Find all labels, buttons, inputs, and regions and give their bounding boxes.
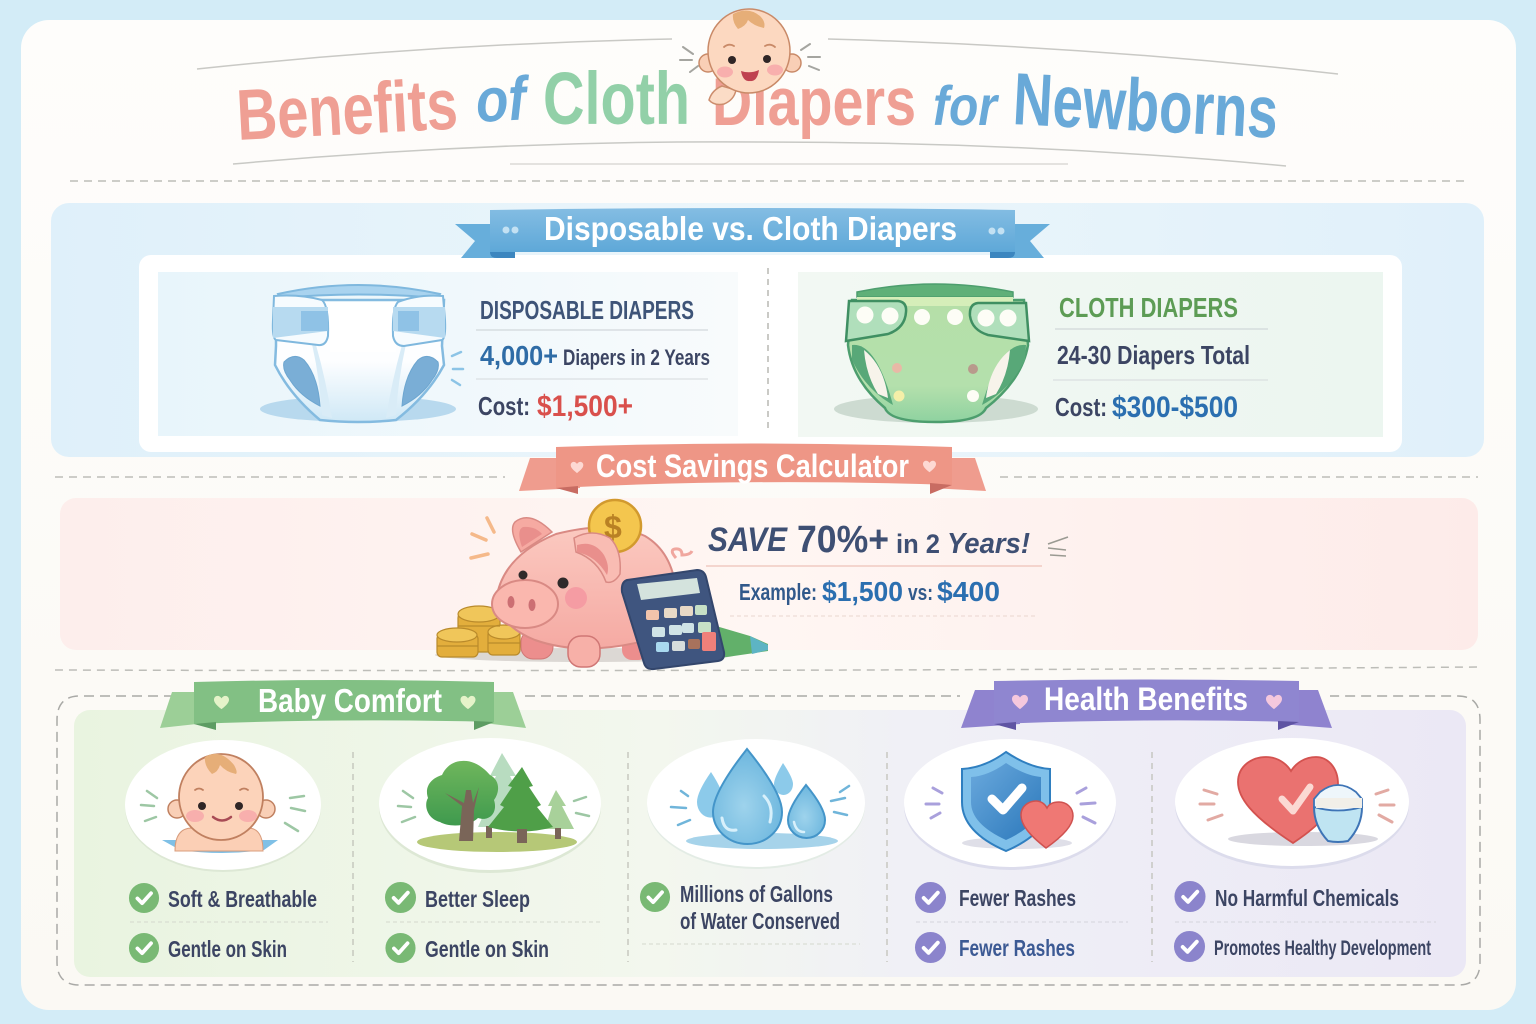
icon: calculator: [622, 570, 768, 669]
banner: Baby Comfort: Baby Comfort: [258, 682, 442, 719]
item: Promotes Healthy Development: [1174, 931, 1431, 962]
text: savings headline: Years!: [947, 528, 1030, 560]
illustration: piggy bank with coins and calculator: [435, 500, 768, 669]
icon: water drops: [647, 739, 865, 869]
text: savings example: $400: [937, 576, 1000, 607]
icon: gold coin: [589, 500, 641, 552]
item: Better Sleep: Better Sleep: [425, 886, 530, 912]
item: Fewer Rashes: Fewer Rashes: [959, 935, 1075, 961]
title: Newborns: [1011, 57, 1280, 154]
icon: coin stacks: [437, 606, 520, 657]
banner: Cost Savings Calculator: Cost Savings Calculator: [596, 448, 909, 484]
column: better sleep: [379, 738, 602, 963]
text: cloth cost: $300-$500: [1112, 391, 1238, 424]
title: Diapers: [712, 64, 916, 140]
text: disposable cost: $1,500+: [537, 390, 633, 423]
text: disposable count: [476, 340, 710, 379]
item: Promotes Healthy Development: Promotes Healthy Development: [1214, 937, 1431, 960]
text: savings headline: SAVE: [708, 521, 788, 559]
title: Benefits: [235, 65, 460, 156]
divider: [55, 476, 1478, 478]
item: No Harmful Chemicals: [1174, 881, 1436, 922]
banner: Health Benefits: [961, 680, 1332, 730]
text: disposable count: 4,000+: [480, 340, 558, 371]
text: disposable heading: DISPOSABLE DIAPERS: [480, 295, 694, 325]
panel: cloth diapers: [798, 272, 1383, 437]
item: Millions of Gallons of Water Conserved: [640, 881, 860, 944]
icon: baby: [125, 740, 321, 872]
column dividers: [353, 752, 1152, 962]
icon: baby mascot: [680, 9, 820, 104]
item: Better Sleep: [385, 882, 602, 922]
column: soft and breathable: [125, 740, 328, 963]
item: Fewer Rashes: [915, 932, 1075, 963]
divider: [55, 667, 1480, 671]
column: fewer rashes: [904, 739, 1128, 963]
title: of: [474, 64, 532, 136]
panel: savings background: [60, 498, 1478, 650]
item: Millions of Gallons of Water Conserved: of Water Conserved: [680, 908, 840, 934]
icon: trees: [379, 738, 601, 873]
panel: comparison white card: [139, 255, 1402, 452]
item: Soft and Breathable: [129, 883, 328, 922]
banner: Disposable vs. Cloth Diapers: [455, 208, 1050, 258]
item: Gentle on Skin: Gentle on Skin: [425, 936, 549, 962]
text: cloth heading: CLOTH DIAPERS: [1059, 292, 1238, 323]
banner: Cost Savings Calculator: [519, 444, 986, 494]
divider: [70, 180, 1465, 182]
icon: cloth diaper: [834, 284, 1038, 423]
text: savings headline: in 2: [896, 529, 940, 559]
text: disposable cost: [478, 390, 633, 423]
panel: benefits frame: [57, 696, 1480, 985]
item: Millions of Gallons of Water Conserved: Millions of Gallons: [680, 881, 833, 907]
item: Fewer Rashes: Fewer Rashes: [959, 885, 1076, 911]
item: No Harmful Chemicals: No Harmful Chemicals: [1215, 885, 1399, 911]
divider: [767, 268, 769, 432]
icon: disposable diaper: [260, 285, 463, 422]
title: Cloth: [543, 57, 690, 140]
banner: Health Benefits: Health Benefits: [1044, 681, 1248, 717]
text: disposable cost: Cost:: [478, 391, 530, 421]
item: Fewer Rashes: [915, 882, 1128, 922]
banner: Baby Comfort: [160, 680, 526, 730]
text: savings example: $1,500: [822, 576, 903, 607]
title: for: [933, 74, 1000, 137]
item: Gentle on Skin: Gentle on Skin: [168, 936, 287, 962]
item: Gentle on Skin: [385, 933, 549, 963]
text: savings example: Example:: [739, 579, 817, 605]
column: water conserved: [640, 739, 865, 944]
banner: Disposable vs. Cloth Diapers: Disposable vs. Cloth Diapers: [544, 210, 957, 247]
column: no harmful chemicals: [1174, 738, 1436, 962]
panel: comparison background: [51, 203, 1484, 457]
icon: heart and jar: [1175, 738, 1409, 869]
text: cloth count: 24-30 Diapers Total: [1057, 340, 1250, 370]
icon: gold coin: $: [604, 509, 622, 545]
title: [197, 39, 1338, 166]
item: Soft and Breathable: Soft & Breathable: [168, 886, 317, 912]
icon: shield and heart: [904, 739, 1116, 870]
text: savings example: [730, 576, 1038, 616]
text: savings headline: 70%+: [797, 519, 889, 561]
text: savings headline: [706, 519, 1068, 566]
text: cloth cost: Cost:: [1055, 392, 1107, 422]
text: savings example: vs:: [908, 580, 933, 605]
text: disposable count: Diapers in 2 Years: [563, 345, 710, 370]
item: Gentle on Skin: [129, 933, 287, 963]
text: cloth cost: [1055, 391, 1238, 424]
panel: disposable diapers: [158, 272, 738, 436]
